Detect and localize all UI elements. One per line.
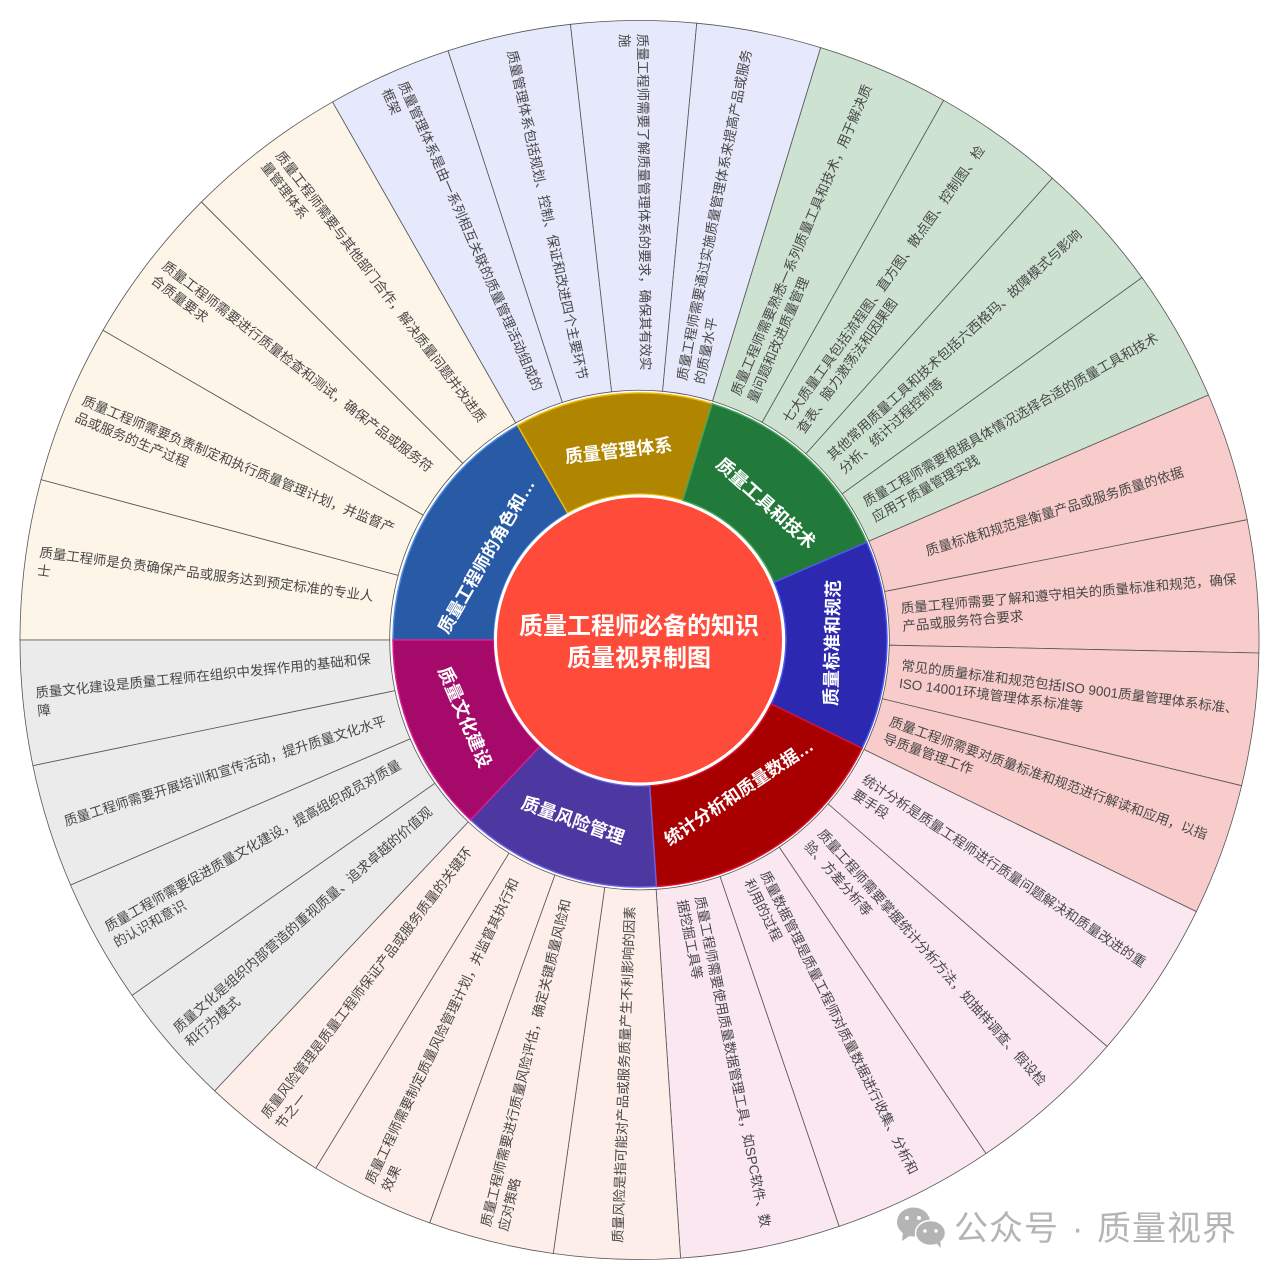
leaf: tools 3 [806, 178, 1142, 494]
leaf: risk 1: 质量风险是指可能对产品或服务质量产生不利影响的因素 [610, 906, 638, 1243]
leaf: standards 1: 质量标准和规范是衡量产品或服务质量的依据 [924, 465, 1185, 559]
leaf: tools 1 [713, 48, 944, 422]
leaf: tools 4: 质量工程师需要根据具体情况选择合适的质量工具和技术 [860, 330, 1161, 509]
panel: middle ring categories [393, 393, 887, 887]
leaf: system 4: 的质量水平 [692, 316, 720, 385]
leaf: statistics 1 [828, 750, 1196, 1046]
icon: wechat [897, 1208, 946, 1248]
watermark [897, 1208, 1237, 1248]
leaf: culture 1 [132, 783, 468, 1091]
leaf: system 3: 质量工程师需要了解质量管理体系的要求，确保其有效实 [635, 34, 653, 371]
leaf: standards 3: ISO 14001环境管理体系标准等 [898, 675, 1084, 715]
center circle with title [496, 496, 784, 784]
leaf: role 1: 质量工程师是负责确保产品或服务达到预定标准的专业人 [39, 545, 374, 604]
category: roles: 质量工程师的角色和… [434, 475, 539, 637]
leaf: standards 4 [864, 699, 1242, 912]
leaf: role 2: 品或服务的生产过程 [73, 410, 191, 470]
leaf: risk 3: 效果 [379, 1163, 404, 1194]
leaf: standards 4: 导质量管理工作 [881, 731, 975, 777]
leaf: culture 4: 质量文化建设是质量工程师在组织中发挥作用的基础和保 [35, 651, 372, 701]
leaf: role 4: 量管理体系 [258, 159, 311, 222]
leaf: standards 2 [885, 520, 1259, 653]
leaf: role 2: 质量工程师需要负责制定和执行质量管理计划，并监督产 [80, 393, 397, 536]
watermark text: · [1072, 1210, 1084, 1248]
leaf: tools 2: 七大质量工具包括流程图、直方图、散点图、控制图、检 [780, 143, 988, 426]
category: quality culture [393, 640, 540, 820]
leaf: statistics 4: 质量工程师需要使用质量数据管理工具，如SPC软件、数 [692, 895, 774, 1229]
leaf: statistics 1: 统计分析是质量工程师进行质量问题解决和质量改进的重 [859, 772, 1149, 970]
leaf: tools 4: 应用于质量管理实践 [869, 451, 982, 525]
leaf: tools 1: 量问题和改进质量管理 [745, 275, 812, 405]
leaf: tools 3: 其他常用质量工具和技术包括六西格玛、故障模式与影响 [824, 227, 1085, 463]
leaf: system 3: 施 [617, 34, 632, 47]
category: quality culture: 质量文化建设 [434, 663, 496, 771]
category: statistics and data: 统计分析和质量数据… [661, 735, 817, 850]
panel: tools leaves [713, 48, 1208, 541]
leaf: risk 4 [215, 822, 509, 1168]
leaf: role 3: 质量工程师需要进行质量检查和测试，确保产品或服务符 [159, 258, 435, 475]
panel: quality culture leaves [20, 640, 468, 1091]
leaf: culture 4 [20, 640, 395, 766]
panel: risk management leaves [215, 822, 681, 1259]
leaf: tools 2 [762, 100, 1052, 454]
leaf: statistics 3: 质量数据管理是质量工程师对质量数据进行收集、分析和 [757, 869, 921, 1177]
panel: standards leaves [864, 395, 1259, 912]
category: risk management: 质量风险管理 [519, 792, 627, 848]
leaf: role 1: 士 [36, 563, 52, 579]
leaf: system 1: 质量管理体系是由一系列相互关联的质量管理活动组成的 [395, 79, 545, 393]
leaf: risk 3: 质量工程师需要制定质量风险管理计划，并监督其执行和 [363, 876, 522, 1186]
leaf: culture 4: 障 [37, 702, 52, 719]
leaf: system 2: 质量管理体系包括规划、控制、保证和改进四个主要环节 [504, 49, 590, 381]
leaf: system 4 [663, 23, 821, 401]
leaf: system 4: 质量工程师需要通过实施质量管理体系来提高产品或服务 [674, 48, 755, 382]
leaf: standards 4: 质量工程师需要对质量标准和规范进行解读和应用，以指 [887, 713, 1210, 842]
watermark text: 质量视界 [1097, 1210, 1237, 1248]
leaf: statistics 3 [720, 847, 986, 1226]
category: management system [518, 393, 712, 513]
category: tools [683, 404, 867, 582]
leaf: role 4 [201, 102, 516, 463]
leaf: system 3 [570, 20, 697, 392]
title: 质量工程师必备的知识 [519, 613, 759, 640]
leaf: culture 2: 的认识和意识 [111, 897, 189, 950]
leaf: system 1 [333, 51, 562, 423]
leaf: standards 2: 质量工程师需要了解和遵守相关的质量标准和规范，确保 [900, 571, 1237, 616]
leaf: system 2 [448, 24, 612, 402]
leaf: risk 2: 应对策略 [495, 1176, 523, 1233]
category: statistics and data [650, 704, 862, 886]
leaf: standards 3 [882, 645, 1259, 786]
category: standards [771, 542, 887, 748]
leaf: role 3 [103, 202, 463, 515]
leaf: tools 4 [842, 278, 1208, 541]
leaf: culture 2 [71, 739, 435, 995]
leaf: risk 4: 质量风险管理是质量工程师保证产品或服务质量的关键环 [259, 844, 475, 1121]
leaf: standards 1 [869, 395, 1247, 592]
panel: quality management system leaves [333, 20, 821, 423]
leaf: role 4: 质量工程师需要与其他部门合作，解决质量问题并改进质 [273, 148, 489, 425]
leaf: statistics 1: 要手段 [850, 787, 891, 822]
panel: statistics and data leaves [656, 750, 1196, 1258]
leaf: role 2 [41, 330, 423, 575]
leaf: risk 2: 质量工程师需要进行质量风险评估，确定关键质量风险和 [478, 898, 574, 1228]
leaf: culture 3: 质量工程师需要开展培训和宣传活动，提升质量文化水平 [62, 713, 388, 829]
leaf: role 1 [20, 480, 398, 640]
leaf: statistics 3: 利用的过程 [741, 877, 785, 944]
leaf: tools 3: 分析、统计过程控制等 [836, 375, 946, 477]
leaf: culture 3 [33, 691, 410, 885]
watermark text: 公众号 [954, 1210, 1059, 1248]
leaf: risk 2 [430, 875, 605, 1254]
leaf: standards 3: 常见的质量标准和规范包括ISO 9001质量管理体系标准、 [901, 658, 1239, 717]
leaf: standards 2: 产品或服务符合要求 [902, 608, 1024, 634]
category: roles [393, 426, 568, 640]
leaf: culture 1: 质量文化是组织内部营造的重视质量、追求卓越的价值观 [170, 804, 435, 1036]
panel: roles leaves [20, 102, 516, 640]
title: 质量视界制图 [567, 645, 711, 672]
leaf: statistics 4 [656, 877, 839, 1258]
leaf: statistics 2: 质量工程师需要掌握统计分析方法，如抽样调查、假设检 [815, 826, 1049, 1089]
leaf: tools 1: 质量工程师需要熟悉一系列质量工具和技术，用于解决质 [728, 82, 875, 398]
leaf: risk 1 [553, 887, 681, 1259]
leaf: role 3: 合质量要求 [148, 273, 211, 326]
category: management system: 质量管理体系 [564, 434, 673, 467]
category: tools: 质量工具和技术 [712, 453, 820, 553]
leaf: statistics 2 [779, 804, 1107, 1154]
leaf: tools 2: 查表、脑力激荡法和因果图 [794, 296, 901, 436]
leaf: risk 4: 节之一 [273, 1091, 309, 1132]
leaf: culture 2: 质量工程师需要促进质量文化建设，提高组织成员对质量 [102, 756, 404, 934]
leaf: culture 1: 和行为模式 [182, 994, 243, 1049]
category: risk management [471, 746, 656, 887]
leaf: system 1: 框架 [379, 86, 403, 117]
category: standards: 质量标准和规范 [820, 580, 844, 706]
leaf: statistics 4: 据挖掘工具等 [674, 898, 706, 981]
leaf: risk 3 [316, 853, 555, 1223]
leaf: statistics 2: 验、方差分析等 [801, 838, 876, 919]
